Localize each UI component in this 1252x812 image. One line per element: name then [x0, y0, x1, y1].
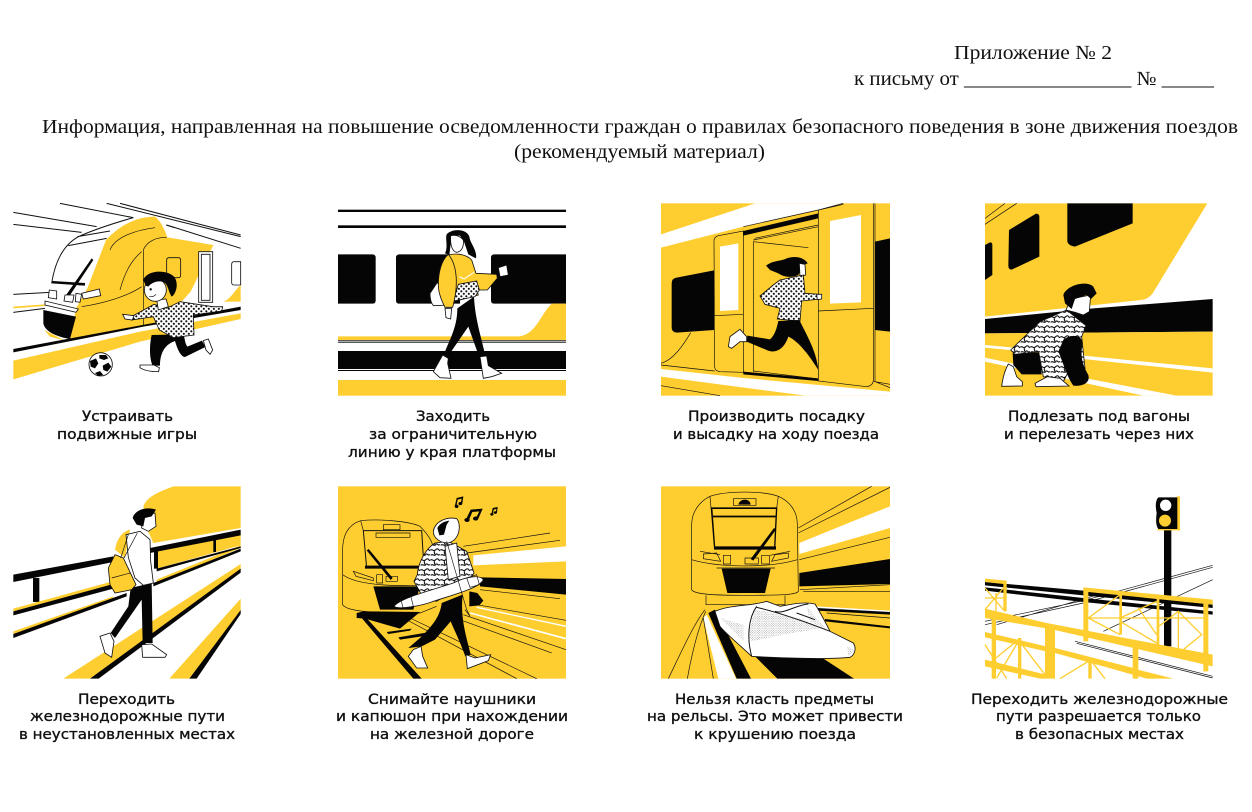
train nose [70, 217, 213, 339]
panel: safe crossing places [985, 496, 1213, 679]
panel: headphones and hood [338, 486, 566, 679]
caption [336, 692, 568, 743]
caption: Переходить [78, 692, 175, 708]
title: (рекомендуемый материал) [514, 141, 765, 163]
panel: crossing in unauthorised places [13, 486, 241, 679]
caption: Подлезать под вагоны [1008, 409, 1190, 425]
caption [57, 409, 197, 443]
woman with skateboard [394, 518, 491, 669]
running woman [728, 257, 822, 370]
caption: в безопасных местах [1015, 727, 1184, 743]
caption: линию у края платформы [348, 445, 556, 461]
caption [1004, 409, 1194, 443]
caption: подвижные игры [57, 427, 197, 443]
caption [647, 692, 903, 743]
caption [673, 409, 879, 443]
caption: железнодорожные пути [30, 709, 225, 725]
caption: и капюшон при нахождении [336, 709, 568, 725]
panel: crawling under wagons [985, 203, 1213, 396]
title [42, 116, 1238, 163]
bag on rails [715, 601, 855, 658]
caption: в неустановленных местах [19, 727, 235, 743]
yellow fence [985, 579, 1213, 679]
caption: на железной дороге [370, 727, 534, 743]
caption: Снимайте наушники [368, 692, 536, 708]
panel: crossing platform edge [338, 210, 566, 396]
header: attachment note [854, 42, 1215, 90]
train doors [661, 203, 890, 396]
header: attachment note: к письму от ________________ № _____ [854, 68, 1215, 90]
running child [123, 272, 223, 372]
walking man with backpack [100, 508, 167, 657]
crouching man [1002, 284, 1097, 387]
icon: football [89, 353, 112, 376]
caption: и перелезать через них [1004, 427, 1194, 443]
caption: Заходить [416, 409, 490, 425]
caption: Нельзя класть предметы [675, 692, 874, 708]
caption: пути разрешается только [996, 709, 1201, 725]
header: attachment note: Приложение № 2 [954, 42, 1112, 64]
train front [692, 492, 798, 605]
caption: Устраивать [82, 409, 173, 425]
panel: boarding a moving train [661, 203, 890, 396]
caption: Переходить железнодорожные [971, 692, 1228, 708]
icon: music notes [455, 496, 498, 522]
title: Информация, направленная на повышение осведомленности граждан о правилах безопасного поведения в зоне движения поездов [42, 116, 1238, 138]
train [343, 520, 437, 679]
caption: за ограничительную [369, 427, 537, 443]
panel: games on platform [13, 203, 241, 379]
caption: к крушению поезда [694, 727, 856, 743]
icon: signal post [1156, 496, 1180, 646]
caption: и высадку на ходу поезда [673, 427, 879, 443]
panel: objects on rails [661, 486, 890, 679]
caption: на рельсы. Это может привести [647, 709, 903, 725]
caption: Производить посадку [688, 409, 865, 425]
caption [348, 409, 556, 461]
caption [971, 692, 1228, 743]
caption [19, 692, 235, 743]
walking woman [430, 230, 508, 378]
